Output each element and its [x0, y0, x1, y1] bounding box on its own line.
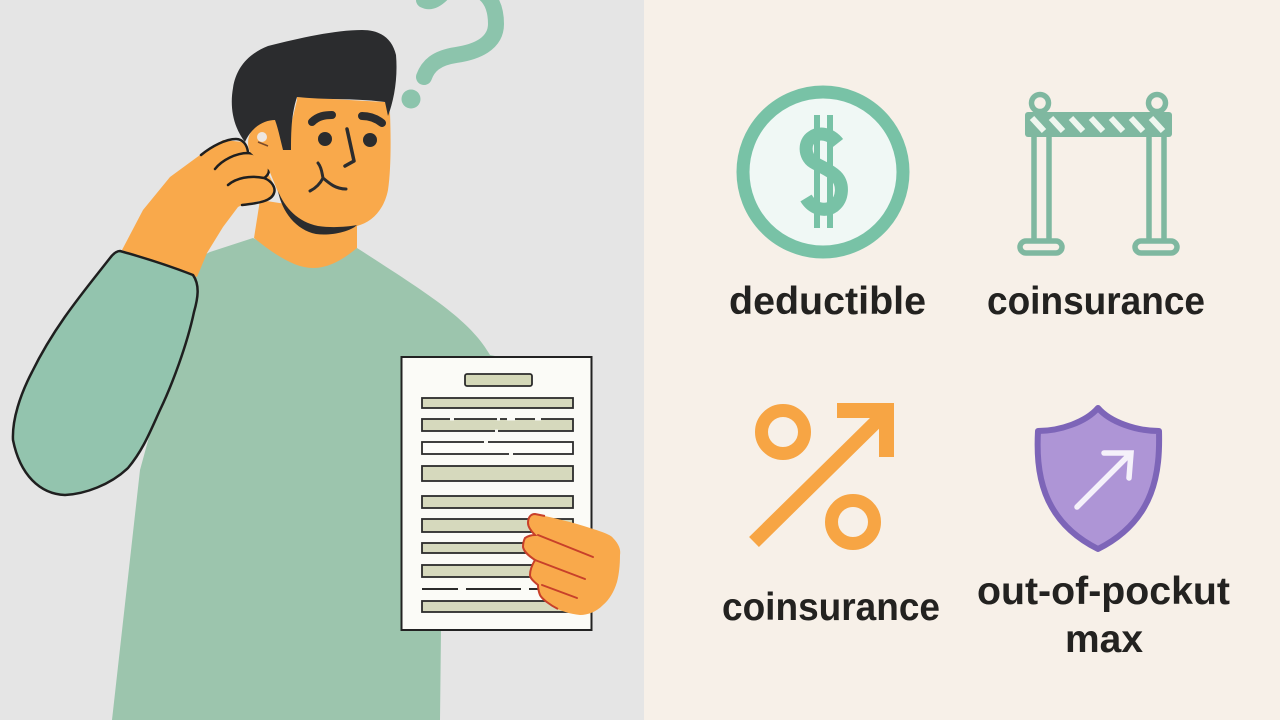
label: coinsurance bottom: coinsurance: [722, 586, 940, 629]
panel: left background: [0, 0, 644, 720]
document text rows: [422, 398, 573, 612]
icon: question mark: [402, 0, 496, 109]
eyebrows: [312, 115, 382, 123]
label: out-of-pocket max: out-of-pockut: [977, 570, 1230, 613]
icon: dollar coin: [743, 92, 903, 252]
document title bar: [465, 374, 532, 386]
beard line: [278, 191, 357, 235]
label: deductible: deductible: [729, 280, 926, 323]
label: out-of-pocket max: [977, 570, 1230, 661]
nose: [345, 129, 354, 166]
icon: shield with arrow: [1038, 408, 1159, 549]
label: coinsurance top: coinsurance: [987, 280, 1205, 323]
document: [402, 357, 620, 630]
panel: right background: [644, 0, 1280, 720]
hair: [232, 30, 397, 150]
shirt body: [112, 238, 500, 720]
hand holding document: [523, 514, 620, 615]
hand finger lines: [201, 139, 275, 205]
label: out-of-pocket max: max: [1065, 618, 1143, 661]
forearm and hand: [122, 140, 275, 277]
icon: barrier: [1020, 94, 1177, 253]
eyes: [318, 132, 332, 146]
illustration: confused man: [13, 30, 500, 720]
face: [248, 97, 391, 232]
ear detail: [257, 132, 267, 142]
icon: percent with arrow: [754, 403, 894, 544]
mouth: [310, 163, 346, 191]
neck: [254, 200, 357, 268]
sleeve: [13, 251, 198, 495]
